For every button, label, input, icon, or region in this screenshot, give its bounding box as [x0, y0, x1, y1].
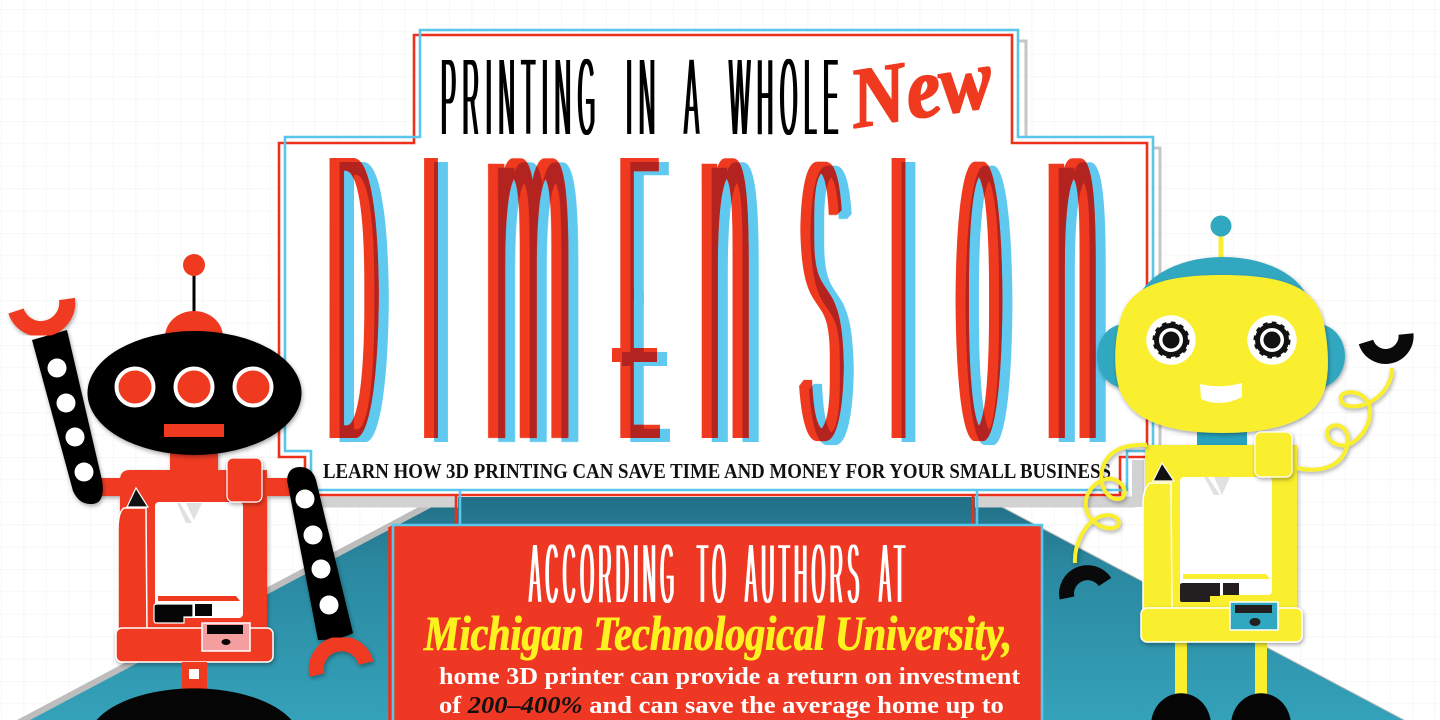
heading: dimension: I [890, 53, 907, 540]
subtitle: LEARN HOW 3D PRINTING CAN SAVE TIME AND MONEY FOR YOUR SMALL BUSINESS [323, 459, 1111, 483]
antenna [1210, 216, 1232, 260]
heading: new: New [842, 30, 998, 147]
eyes [116, 368, 272, 406]
heading: printing in a whole: IN [626, 35, 662, 161]
title card frame [279, 30, 1153, 495]
title card shadow [305, 41, 1160, 507]
heading: printing in a whole: PRINTING [441, 35, 602, 161]
callout body text: of 200–400% and can save the average home up to [439, 692, 1004, 719]
callout heading [529, 524, 910, 623]
eyes with gears [1146, 315, 1297, 365]
antenna [183, 254, 205, 314]
heading: printing in a whole [441, 35, 845, 161]
teal diamond platform [17, 497, 1405, 720]
control box [202, 623, 250, 651]
print head triangle [1153, 463, 1174, 481]
callout heading: TO [697, 524, 730, 623]
heading: dimension: I [422, 53, 440, 540]
callout body text: home 3D printer can provide a return on investment [439, 664, 1020, 690]
waist [182, 662, 207, 690]
right claw [1366, 334, 1406, 356]
base [1141, 608, 1302, 642]
print bed [1180, 574, 1270, 602]
print bed [154, 596, 240, 623]
left claw [16, 299, 67, 329]
mouth [164, 424, 224, 437]
robot: red and black [16, 254, 366, 720]
callout heading: AT [879, 524, 910, 623]
left arm [32, 330, 103, 504]
left claw [1067, 573, 1105, 598]
ears and dome [1097, 257, 1345, 388]
heading: printing in a whole: A [684, 35, 706, 161]
heading: dimension: E [620, 53, 658, 541]
right claw [316, 644, 366, 675]
shoulder block [1255, 432, 1292, 477]
right arm [287, 467, 353, 640]
heading: dimension: S [799, 65, 843, 538]
callout heading: ACCORDING [529, 524, 679, 623]
heading: dimension: D [328, 54, 378, 542]
heading: dimension [330, 158, 1106, 446]
panel: red callout [390, 524, 1042, 720]
base [116, 628, 273, 662]
smile [1200, 383, 1242, 403]
robot: yellow and teal [1067, 216, 1406, 720]
heading: printing in a whole: WHOLE [729, 35, 845, 161]
neck [1197, 430, 1247, 448]
dome [165, 311, 223, 363]
head [1115, 275, 1328, 433]
right coiled arm [1297, 368, 1392, 470]
callout university name: Michigan Technological University, [423, 605, 1012, 661]
head [88, 331, 302, 455]
feet [1151, 693, 1291, 720]
shoulder block [227, 458, 262, 502]
left column [118, 508, 147, 638]
torso frame [1145, 445, 1297, 625]
print head triangle [127, 488, 148, 507]
callout body text [439, 664, 1020, 719]
left coiled arm [1075, 445, 1147, 563]
lower body [96, 688, 292, 720]
callout heading: AUTHORS [745, 524, 864, 623]
control box [1230, 602, 1278, 630]
left column [1143, 483, 1172, 618]
connector frame above red panel [456, 490, 977, 527]
legs [1175, 640, 1267, 696]
neck and torso frame [100, 450, 290, 630]
heading: dimension: O [957, 64, 1001, 537]
